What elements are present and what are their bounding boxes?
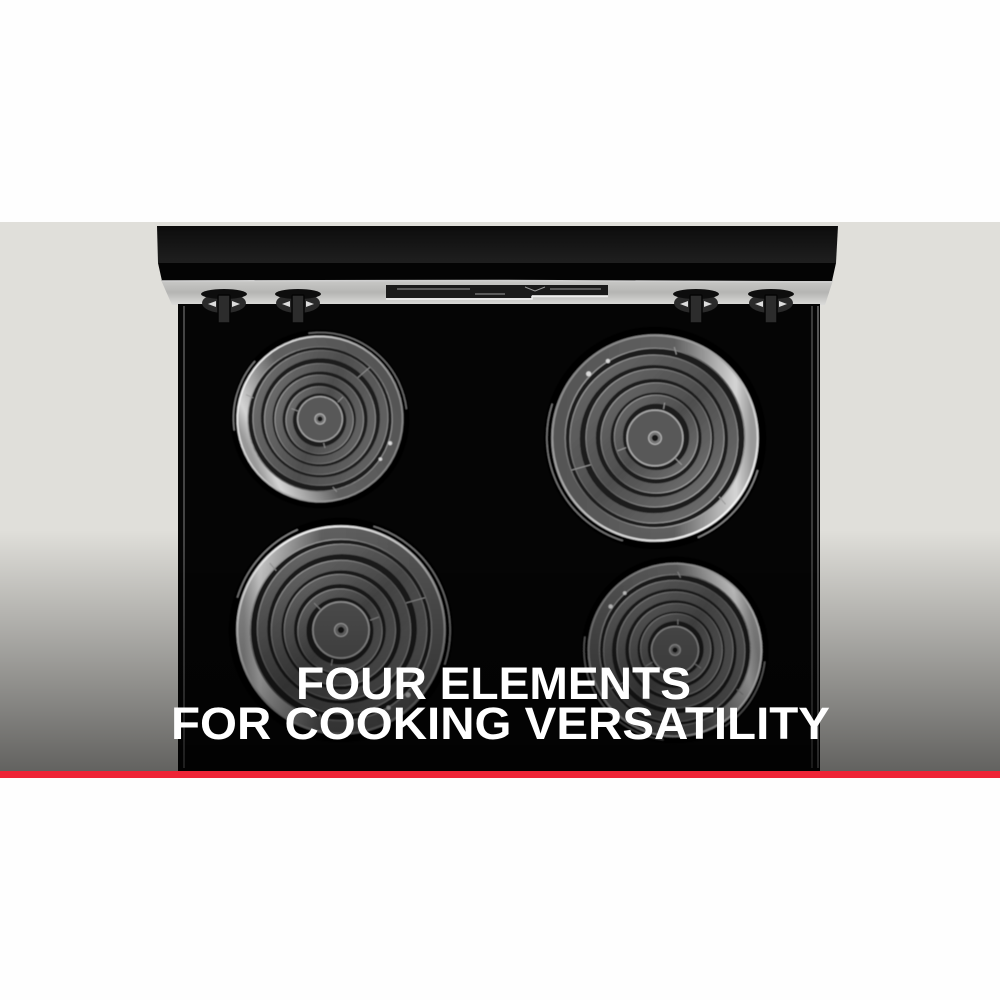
range: stove top view <box>157 226 838 771</box>
bottom dark fade overlay <box>0 530 1000 771</box>
title <box>171 658 830 749</box>
silver control panel <box>161 280 833 305</box>
hood light trim <box>162 280 832 282</box>
hood front edge <box>158 263 836 281</box>
knob 3 <box>673 289 719 323</box>
hood glossy upper surface <box>157 226 838 263</box>
burner: bottom left <box>229 518 453 742</box>
title: FOR COOKING VERSATILITY <box>171 698 830 749</box>
knob 1 <box>201 289 247 323</box>
knob 2 <box>275 289 321 323</box>
title: FOUR ELEMENTS <box>296 658 691 709</box>
top white background <box>0 0 1000 222</box>
black cooktop <box>178 304 820 771</box>
knob 4 <box>748 289 794 323</box>
red stripe <box>0 771 1000 778</box>
burner: top right <box>544 327 766 549</box>
bottom white background <box>0 778 1000 1000</box>
control display <box>386 285 608 299</box>
burner: top left <box>201 300 439 538</box>
burner: bottom right <box>567 542 783 758</box>
beige backdrop band <box>0 222 1000 772</box>
